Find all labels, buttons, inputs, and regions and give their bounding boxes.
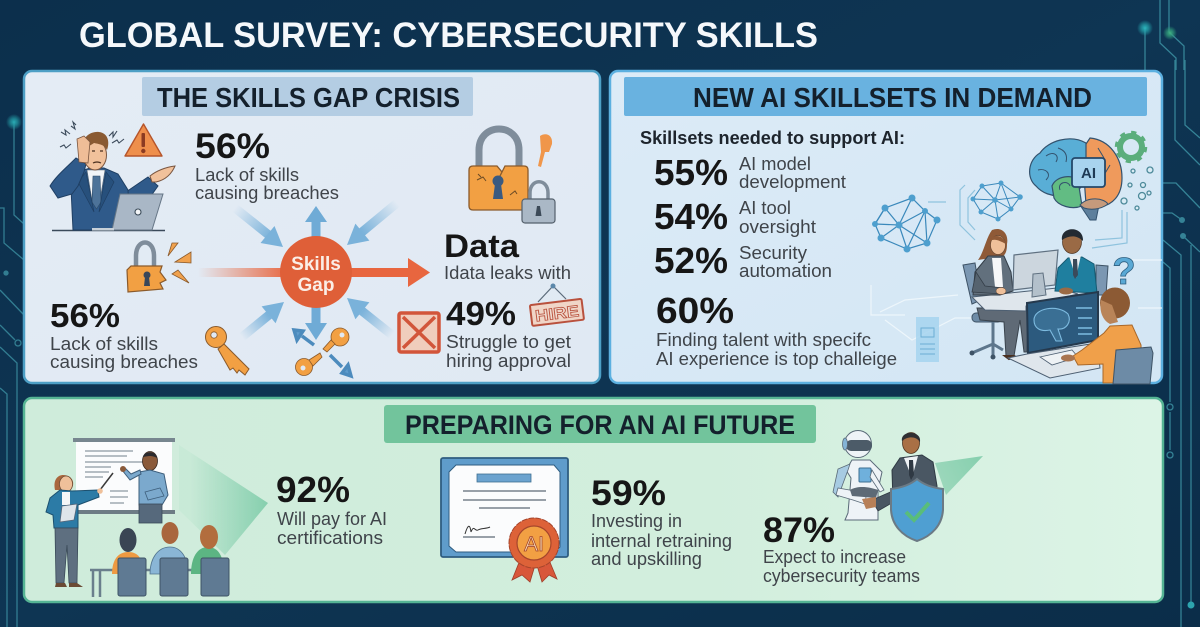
- desk front: [1008, 343, 1100, 378]
- arrow: red arrow to data: [198, 258, 430, 287]
- stat: 56% breaches top: Lack of skills: [195, 165, 299, 185]
- stat: 60% finding talent: AI experience is top challeige: [656, 349, 897, 369]
- head: [77, 132, 108, 170]
- stat: 59% internal retraining: 59%: [591, 474, 666, 513]
- businessman: [862, 432, 937, 511]
- wedge pointer right: [935, 456, 983, 495]
- circuit pattern: left edge: [0, 114, 24, 627]
- wedge pointer left: [179, 445, 268, 555]
- stat: 49% hiring approval: 49%: [446, 295, 516, 332]
- icon: crossed box: [399, 313, 439, 352]
- right arm and hand: [126, 166, 175, 214]
- decorative data dots icon: [1121, 167, 1153, 210]
- stat: 52% security automation: 52%: [654, 240, 728, 281]
- stat: 56% breaches top: causing breaches: [195, 183, 339, 203]
- icon: document: [916, 317, 939, 362]
- icon: hire sign: HIRE: [534, 303, 580, 325]
- stat: 52% security automation: [654, 240, 832, 281]
- icon: neural network right: [970, 180, 1023, 222]
- icon: question mark: ?: [1112, 251, 1136, 293]
- monitor back: [1013, 250, 1058, 297]
- stat: 54% AI tool oversight: AI tool: [739, 198, 791, 218]
- panel background: [24, 398, 1163, 602]
- desk back: [972, 288, 1078, 311]
- stat: 59% internal retraining: Investing in: [591, 511, 682, 531]
- stat: 87% cybersecurity teams: [763, 511, 920, 586]
- heading bar: PREPARING FOR AN AI FUTURE: [405, 410, 795, 440]
- stat: 92% certifications: Will pay for AI: [277, 509, 387, 529]
- stat: 56% breaches bottom: 56%: [50, 297, 120, 334]
- heading bar: [624, 77, 1147, 116]
- icon: broken lock with shards: [127, 242, 191, 292]
- audience member 2: [150, 522, 188, 596]
- big monitor with brain: [1027, 292, 1098, 353]
- panel: the skills gap crisis: [24, 71, 600, 383]
- shirt and tie: [78, 170, 114, 212]
- icon: AI certificate: [441, 458, 568, 582]
- circuit pattern: right edge: [1137, 0, 1200, 627]
- stat: 56% breaches top: 56%: [195, 127, 270, 166]
- circuit lines teal: [928, 185, 1127, 248]
- man presenting: [120, 452, 168, 523]
- stat: 87% cybersecurity teams: 87%: [763, 511, 835, 550]
- icon: hire sign: [530, 284, 584, 326]
- stat: 55% AI model development: AI model: [739, 154, 811, 174]
- stat: 56% breaches bottom: causing breaches: [50, 352, 198, 372]
- icon: AI certificate: AI: [524, 533, 544, 556]
- man seated back: [1055, 229, 1108, 295]
- heading bar: NEW AI SKILLSETS IN DEMAND: [693, 82, 1092, 113]
- stat: 92% certifications: 92%: [276, 469, 350, 510]
- stat: 87% cybersecurity teams: cybersecurity teams: [763, 566, 920, 586]
- laptop: [92, 194, 163, 230]
- shield: [891, 479, 943, 541]
- audience member 1: [112, 528, 146, 596]
- stat: 49% hiring approval: hiring approval: [446, 351, 571, 371]
- stat: 59% internal retraining: [591, 474, 732, 569]
- stat: data leaks: [444, 228, 571, 283]
- icon: neural network left: [872, 194, 940, 252]
- heading bar: THE SKILLS GAP CRISIS: [157, 82, 460, 113]
- screen: [73, 438, 175, 514]
- woman legs: [977, 308, 1028, 356]
- subheading: Skillsets needed to support AI:: [640, 127, 905, 148]
- stat: 60% finding talent: Finding talent with specifc: [656, 330, 871, 350]
- skills gap circle: Gap: [298, 275, 334, 296]
- stat: 49% hiring approval: Struggle to get: [446, 332, 571, 352]
- person in orange: [1061, 288, 1153, 384]
- table: [90, 570, 205, 597]
- icon: broken padlock with small lock: [469, 129, 555, 223]
- panel: new AI skillsets in demand: [610, 71, 1162, 384]
- stat: 59% internal retraining: internal retraining: [591, 531, 732, 551]
- stat: 55% AI model development: development: [739, 172, 846, 192]
- panel: preparing for an AI future: [24, 398, 1163, 602]
- woman with pointer: [46, 473, 113, 587]
- stat: 56% breaches bottom: Lack of skills: [50, 334, 158, 354]
- circuit lines behind illustration: [871, 260, 1162, 340]
- icon: gear: [1117, 133, 1145, 161]
- icon: presentation group: [46, 438, 229, 597]
- keyboard: [1040, 350, 1078, 365]
- stat: 60% finding talent: [656, 290, 897, 369]
- stat: 54% AI tool oversight: [654, 196, 816, 237]
- stat: 55% AI model development: 55%: [654, 152, 728, 193]
- raised left arm: [50, 158, 86, 198]
- stat: 54% AI tool oversight: oversight: [739, 217, 816, 237]
- stat: 92% certifications: certifications: [277, 528, 383, 548]
- title: GLOBAL SURVEY: CYBERSECURITY SKILLS: [79, 16, 818, 55]
- stat: 60% finding talent: 60%: [656, 290, 734, 331]
- chair: woman: [963, 263, 1003, 360]
- icon: orange key: [206, 326, 249, 375]
- stat: 56% breaches bottom: [50, 297, 198, 372]
- icon: AI brain: AI: [1081, 165, 1096, 182]
- icon: robot and businessman with shield: [833, 430, 943, 541]
- skills gap circle: [280, 236, 352, 308]
- stat: 56% breaches top: [195, 127, 339, 203]
- arrows: blue arrows toward skills gap: [235, 203, 397, 340]
- panel background: [24, 71, 600, 383]
- stat: 92% certifications: [276, 469, 387, 548]
- icon: warning triangle: [125, 124, 162, 156]
- icon: AI brain: [1030, 138, 1122, 220]
- torso: [71, 168, 130, 230]
- icon: broken keys with arrows: [294, 328, 351, 376]
- stat: 52% security automation: Security: [739, 243, 807, 263]
- skills gap circle: Skills: [291, 254, 341, 275]
- robot: [833, 430, 884, 520]
- stat: data leaks: Data: [444, 228, 519, 264]
- stat: data leaks: Idata leaks with: [444, 263, 571, 283]
- stat: 54% AI tool oversight: 54%: [654, 196, 728, 237]
- stat: 52% security automation: automation: [739, 261, 832, 281]
- woman shoes: [1005, 356, 1016, 359]
- panel background: [610, 71, 1162, 383]
- stat: 55% AI model development: [654, 152, 846, 193]
- stat: 59% internal retraining: and upskilling: [591, 549, 702, 569]
- stat: 87% cybersecurity teams: Expect to increase: [763, 547, 906, 567]
- illustration: team at workstations: [963, 229, 1153, 384]
- stat: 49% hiring approval: [446, 295, 571, 371]
- woman: [972, 229, 1013, 295]
- audience member 3: [191, 525, 229, 596]
- icon: stressed man at laptop: [50, 122, 175, 230]
